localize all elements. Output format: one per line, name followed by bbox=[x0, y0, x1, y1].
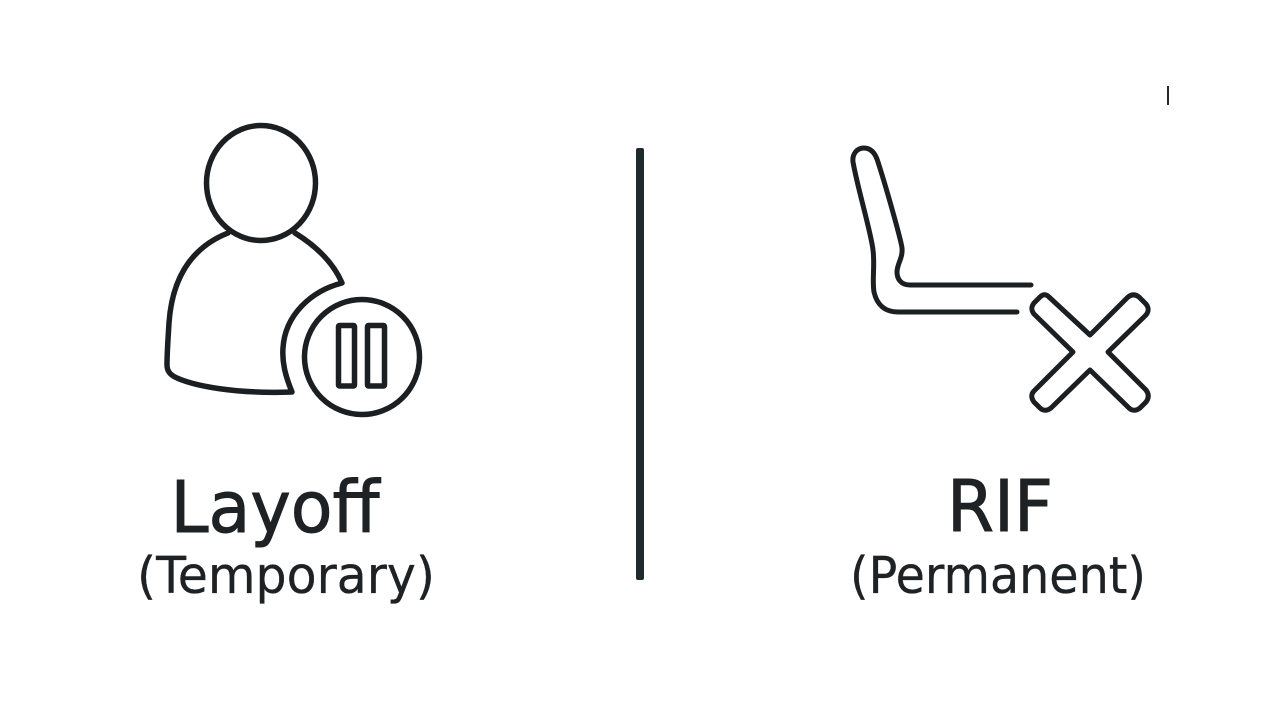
center divider bbox=[636, 148, 644, 580]
text: Temporary: (Temporary) bbox=[137, 547, 435, 606]
small tick mark bbox=[1167, 86, 1169, 105]
text: Permanent: (Permanent) bbox=[850, 547, 1146, 606]
heading: RIF: RIF bbox=[947, 465, 1053, 548]
heading: Layoff: Layoff bbox=[170, 466, 382, 549]
icon: chair with cross bbox=[853, 148, 1148, 410]
icon: person with pause badge bbox=[167, 126, 420, 414]
